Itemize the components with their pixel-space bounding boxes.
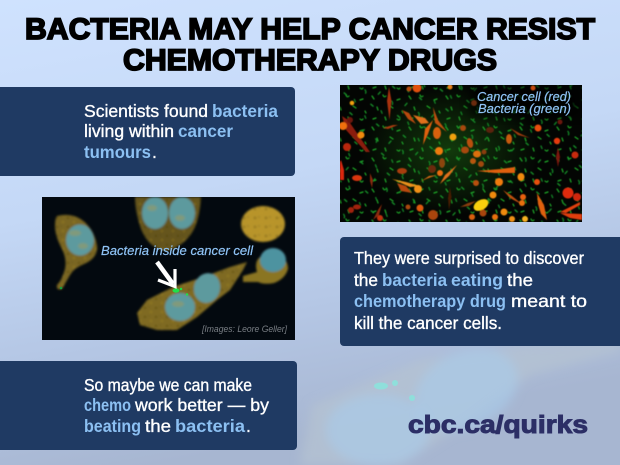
panel: bacteria found in tumours: bacteria [212,101,278,121]
panel: bacteria eat chemotherapy drug: chemotherapy drug [354,291,506,311]
panel: beating the bacteria: So maybe we can make [84,375,252,395]
panel: bacteria eat chemotherapy drug [340,237,620,346]
panel: beating the bacteria: . [246,416,251,436]
panel: bacteria eat chemotherapy drug: the [507,270,533,290]
panel: beating the bacteria: beating [84,416,141,436]
title: CHEMOTHERAPY DRUGS [123,44,497,77]
spindle cells [340,87,582,220]
panel: beating the bacteria: the [145,416,171,436]
nuclei [66,197,286,321]
panel: bacteria found in tumours: . [152,142,157,162]
faded bacteria [374,380,415,401]
cell bodies [55,197,288,330]
photo caption: Bacteria inside cancer cell [101,243,254,258]
panel: bacteria found in tumours: Scientists found [84,101,208,121]
panel: bacteria found in tumours: tumours [84,142,151,162]
image credit: [Images: Leore Geller] [201,324,287,334]
panel: bacteria eat chemotherapy drug: They were surprised to discover [354,248,584,268]
photo label [477,90,571,116]
white arrow [157,262,175,286]
panel: bacteria eat chemotherapy drug: eating [451,270,503,290]
panel: bacteria found in tumours: cancer [178,121,233,141]
panel: bacteria found in tumours: living within [84,121,174,141]
title [25,13,595,77]
panel: beating the bacteria: work better — by [134,395,269,415]
photo label: Bacteria (green) [478,102,571,116]
green bacteria [60,287,188,296]
round cells [339,84,581,222]
faded cell backdrop [300,333,620,465]
photo label: Cancer cell (red) [477,90,571,104]
panel: beating the bacteria: chemo [84,395,131,415]
title: BACTERIA MAY HELP CANCER RESIST [25,13,595,46]
photo: bacteria inside cancer cell [42,197,295,340]
panel: bacteria eat chemotherapy drug: kill the cancer cells. [354,313,502,333]
panel: bacteria found in tumours [0,87,295,176]
photo: cancer cells and bacteria [339,84,582,222]
panel: bacteria eat chemotherapy drug: the [354,270,378,290]
panel: bacteria eat chemotherapy drug: meant to [511,291,587,311]
website link: cbc.ca/quirks [408,411,588,439]
panel: bacteria eat chemotherapy drug: bacteria [382,270,447,290]
panel: beating the bacteria: bacteria [175,416,245,436]
panel: beating the bacteria [0,361,297,450]
